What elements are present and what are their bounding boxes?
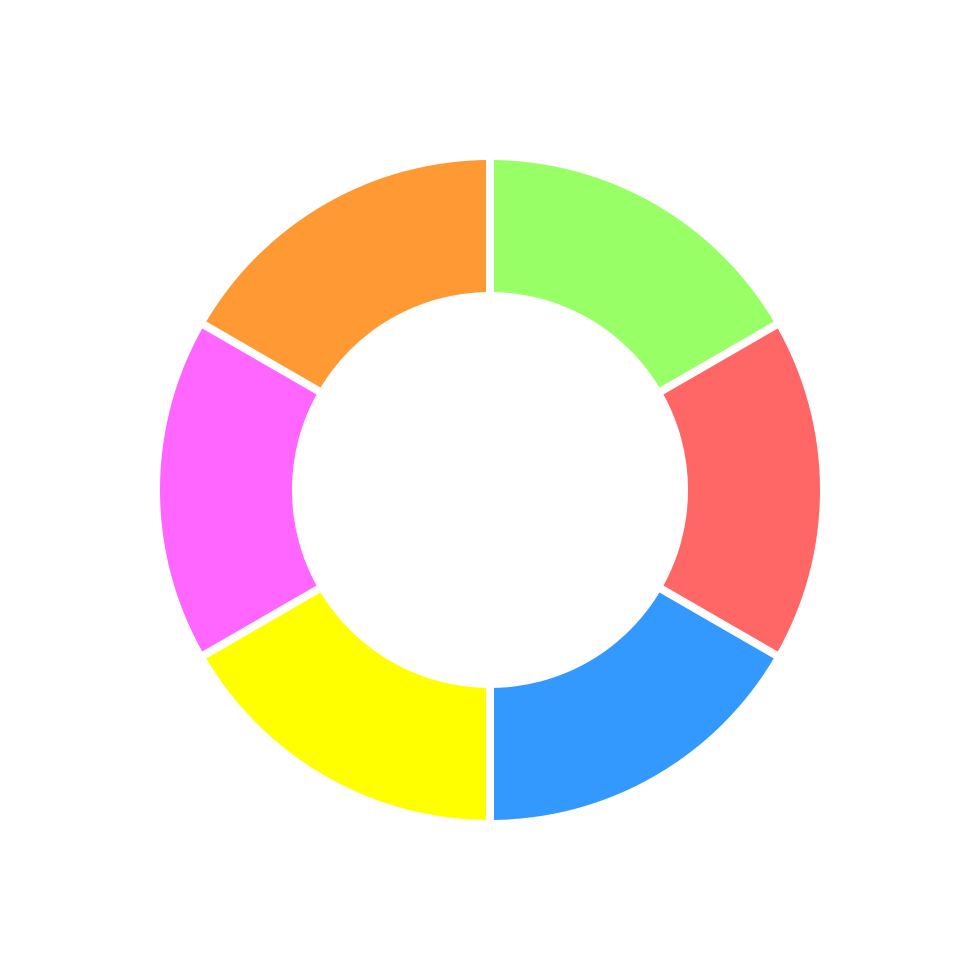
segment: magenta xyxy=(160,325,318,655)
segment: green xyxy=(490,160,776,391)
segment: yellow xyxy=(204,589,490,820)
segment: red xyxy=(662,325,820,655)
segment: orange xyxy=(204,160,490,391)
segment: blue xyxy=(490,589,776,820)
